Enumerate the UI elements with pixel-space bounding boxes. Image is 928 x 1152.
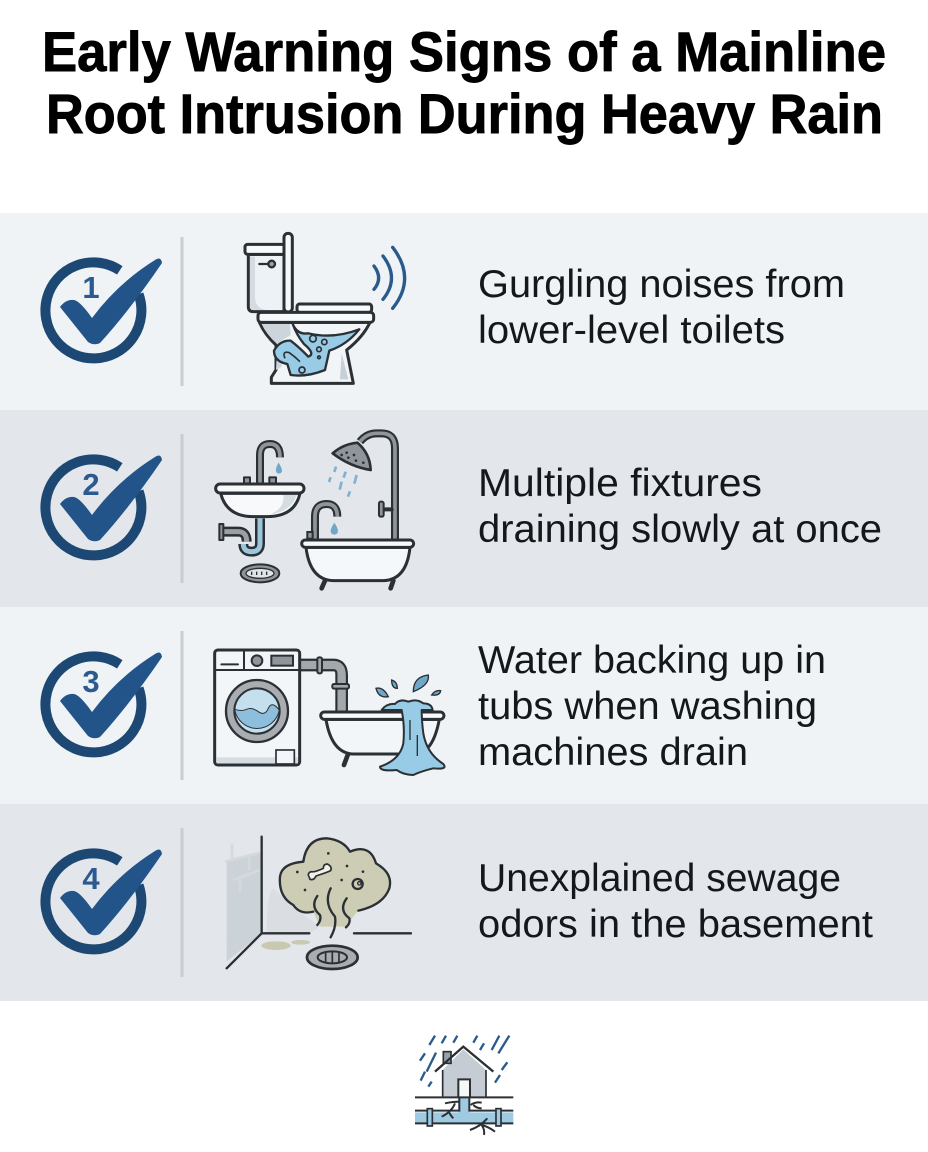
text: sign 3: machines drain [478, 731, 748, 774]
icon: numbered check 1: 1 [82, 270, 100, 305]
icon: numbered check 4: 4 [82, 861, 100, 896]
icon: numbered check 1 [45, 259, 162, 358]
text: sign 4 [478, 857, 873, 946]
icon: numbered check 2 [45, 456, 162, 555]
text: sign 2: draining slowly at once [478, 508, 882, 551]
text: sign 1: lower-level toilets [478, 309, 785, 352]
icon: numbered check 4 [45, 850, 162, 949]
icon: toilet gurgling [245, 233, 405, 383]
text: sign 1: Gurgling noises from [478, 263, 845, 306]
icon: numbered check 3: 3 [82, 664, 100, 699]
text: sign 3 [478, 639, 826, 774]
icon: sink and bathtub [216, 433, 414, 588]
panel: sign 4 sewage odors [0, 804, 928, 1001]
icon: house in rain with root-damaged pipe [415, 1036, 513, 1135]
icon: numbered check 3 [45, 653, 162, 752]
panel: sign 2 slow fixtures [0, 410, 928, 607]
text: sign 4: Unexplained sewage [478, 857, 841, 900]
icon: sewage odor cloud over floor drain [225, 837, 411, 969]
panel: sign 1 gurgling toilets [0, 213, 928, 410]
text: sign 1 [478, 263, 845, 352]
title: Root Intrusion During Heavy Rain [46, 82, 883, 145]
title [42, 20, 886, 145]
icon: numbered check 2: 2 [82, 467, 100, 502]
text: sign 2: Multiple fixtures [478, 462, 762, 505]
text: sign 3: tubs when washing [478, 685, 817, 728]
text: sign 2 [478, 462, 882, 551]
text: sign 4: odors in the basement [478, 903, 873, 946]
icon: washing machine and overflowing tub [215, 650, 445, 775]
panel: sign 3 tub backup [0, 607, 928, 804]
text: sign 3: Water backing up in [478, 639, 826, 682]
title: Early Warning Signs of a Mainline [42, 20, 886, 83]
